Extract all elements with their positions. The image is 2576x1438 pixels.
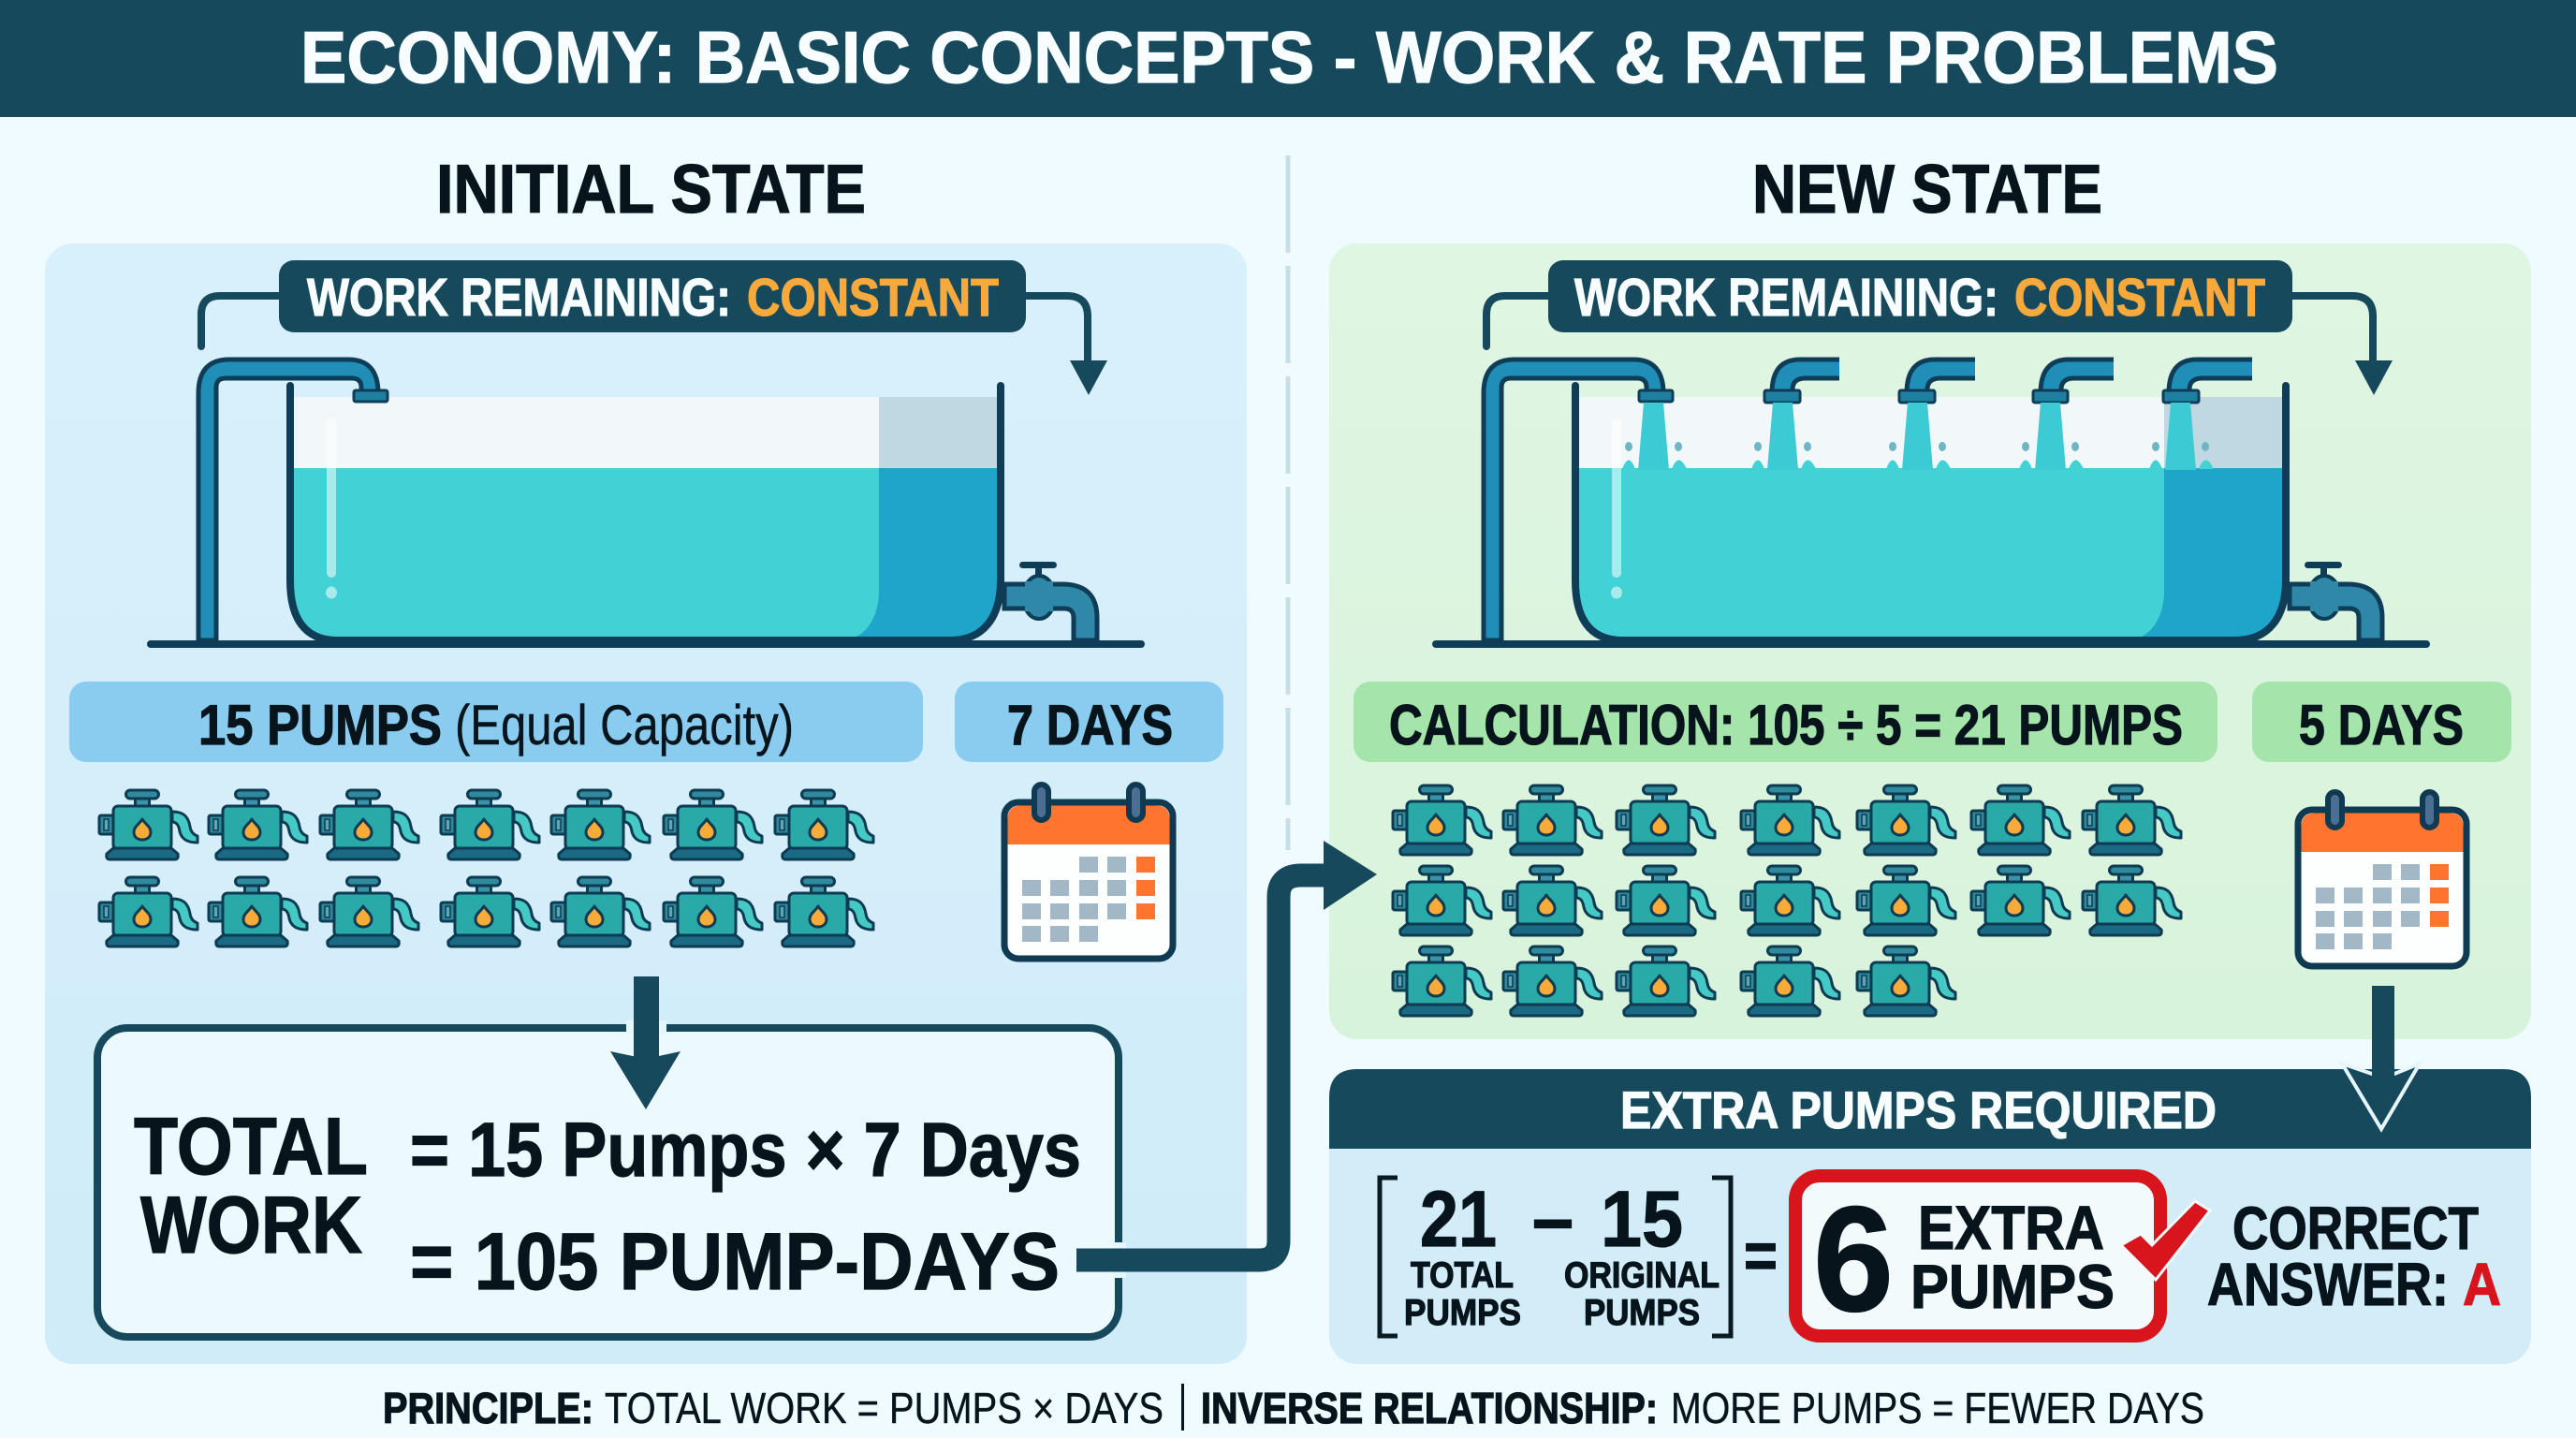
work remaining label with bracket arrow: WORK REMAINING: bbox=[307, 268, 731, 328]
panel: extra pumps required bbox=[1329, 1069, 2531, 1364]
result box: 6 extra pumps: 6 bbox=[1813, 1175, 1894, 1343]
label: 15 pumps bbox=[69, 682, 923, 762]
water streams and splashes bbox=[1622, 403, 2214, 470]
work remaining label with bracket arrow bbox=[201, 260, 1107, 395]
icon: calendar 5 days bbox=[2298, 792, 2466, 966]
total work box bbox=[97, 1028, 1119, 1337]
water tank with five inlets bbox=[1432, 360, 2430, 648]
footer: principle statement: TOTAL WORK = PUMPS × DAYS bbox=[605, 1384, 1164, 1432]
total work box: WORK bbox=[140, 1181, 362, 1270]
arrow: calendar down to extra pumps bbox=[2342, 986, 2420, 1129]
subtraction in brackets bbox=[1380, 1174, 1731, 1336]
icon: calendar 7 days bbox=[1004, 785, 1173, 959]
title banner bbox=[0, 0, 2576, 117]
total work box: = 105 PUMP-DAYS bbox=[410, 1217, 1060, 1307]
heading: extra pumps required: EXTRA PUMPS REQUIRED bbox=[1620, 1080, 2217, 1139]
subtraction in brackets: 21 bbox=[1420, 1175, 1497, 1263]
footer: principle statement: INVERSE RELATIONSHIP: bbox=[1201, 1384, 1658, 1432]
label: 5 days bbox=[2252, 682, 2511, 762]
work remaining label with bracket arrow: CONSTANT bbox=[2014, 268, 2265, 328]
subtraction in brackets: TOTAL bbox=[1411, 1255, 1514, 1296]
correct answer text bbox=[2207, 1195, 2501, 1318]
panel: initial state bbox=[45, 243, 1247, 1364]
water tank with single inlet bbox=[147, 360, 1145, 648]
subtraction in brackets: PUMPS bbox=[1584, 1293, 1700, 1333]
calculation label bbox=[1354, 682, 2217, 762]
total work box: = 15 Pumps × 7 Days bbox=[410, 1108, 1081, 1193]
result box: 6 extra pumps: EXTRA bbox=[1918, 1193, 2104, 1262]
heading: new state: NEW STATE bbox=[1752, 152, 2102, 227]
total work box: TOTAL bbox=[134, 1102, 368, 1192]
label: 7 days bbox=[955, 682, 1223, 762]
footer: principle statement bbox=[383, 1384, 2204, 1432]
heading: initial state: INITIAL STATE bbox=[436, 152, 866, 227]
footer: principle statement: MORE PUMPS = FEWER DAYS bbox=[1671, 1384, 2204, 1432]
subtraction in brackets: ORIGINAL bbox=[1564, 1255, 1720, 1296]
pump icons: new 19 shown bbox=[1393, 785, 2181, 1016]
inlet nozzles bbox=[1764, 390, 2199, 403]
title banner: ECONOMY: BASIC CONCEPTS - WORK & RATE PROBLEMS bbox=[300, 16, 2278, 98]
calculation label: CALCULATION: 105 ÷ 5 = 21 PUMPS bbox=[1389, 694, 2183, 756]
subtraction in brackets: – bbox=[1532, 1174, 1573, 1262]
result box: 6 extra pumps bbox=[1795, 1175, 2160, 1343]
label: 15 pumps: (Equal Capacity) bbox=[455, 694, 794, 756]
arrow: pumps and days into total work bbox=[610, 976, 681, 1109]
arrow: total work to new state bbox=[1076, 841, 1377, 1260]
label: 5 days: 5 DAYS bbox=[2299, 694, 2464, 756]
label: 7 days: 7 DAYS bbox=[1007, 694, 1173, 756]
equals sign: = bbox=[1744, 1219, 1778, 1292]
subtraction in brackets: PUMPS bbox=[1404, 1293, 1521, 1333]
work remaining label with bracket arrow: WORK REMAINING: bbox=[1574, 268, 1998, 328]
work remaining label with bracket arrow bbox=[1486, 260, 2393, 395]
icon: red check mark bbox=[2121, 1201, 2210, 1280]
subtraction in brackets: 15 bbox=[1601, 1175, 1683, 1263]
label: 15 pumps: 15 PUMPS bbox=[198, 694, 442, 756]
correct answer text: A bbox=[2463, 1251, 2501, 1318]
work remaining label with bracket arrow: CONSTANT bbox=[747, 268, 999, 328]
footer: principle statement: PRINCIPLE: bbox=[383, 1384, 593, 1432]
extra inlet pipes bbox=[1772, 360, 2252, 393]
result box: 6 extra pumps: PUMPS bbox=[1910, 1252, 2115, 1321]
correct answer text: CORRECT bbox=[2232, 1195, 2479, 1262]
pump icons: initial 14 shown bbox=[99, 790, 873, 946]
panel: new state bbox=[1329, 243, 2531, 1039]
correct answer text: ANSWER: bbox=[2207, 1251, 2449, 1318]
